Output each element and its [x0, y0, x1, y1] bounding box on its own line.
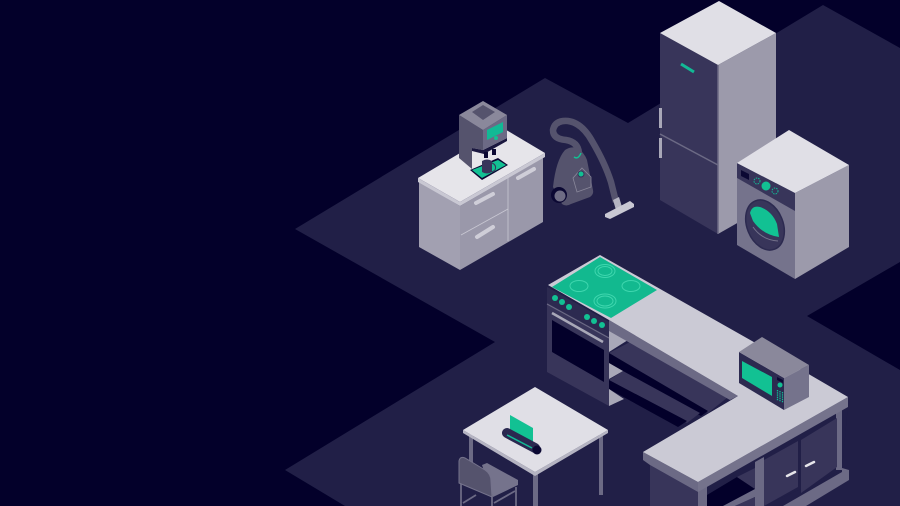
cabinet doors	[764, 418, 837, 506]
coffee machine	[459, 101, 508, 180]
cabinet handles	[476, 169, 534, 237]
oven	[547, 287, 609, 406]
washer control dial	[754, 178, 778, 194]
chair	[459, 457, 518, 506]
lower left cabinet	[650, 465, 698, 506]
floor	[285, 5, 900, 506]
refrigerator	[660, 1, 776, 234]
microwave	[739, 337, 809, 410]
kick plate	[783, 468, 849, 506]
washing machine	[737, 130, 849, 279]
counter strip	[609, 320, 738, 400]
fridge door handles	[659, 108, 662, 158]
vacuum cleaner	[551, 121, 634, 219]
microwave keypad	[778, 390, 782, 403]
back panels under counter	[609, 342, 728, 413]
vacuum wheel	[551, 187, 567, 203]
vacuum nozzle	[605, 197, 634, 219]
stove top	[552, 257, 657, 318]
vacuum hose	[553, 121, 616, 202]
oven knobs	[552, 295, 605, 328]
washer door	[739, 194, 791, 256]
fax paper	[510, 415, 533, 445]
coffee cup	[482, 160, 496, 174]
fridge display light	[681, 64, 694, 72]
coffee mat	[470, 158, 508, 180]
fax roller	[507, 433, 542, 454]
base cabinet frame	[698, 405, 848, 506]
table	[463, 387, 608, 506]
cabinet	[418, 128, 545, 270]
counter top	[548, 255, 848, 482]
L-shaped counter	[547, 255, 849, 506]
counter fascia	[643, 452, 698, 492]
